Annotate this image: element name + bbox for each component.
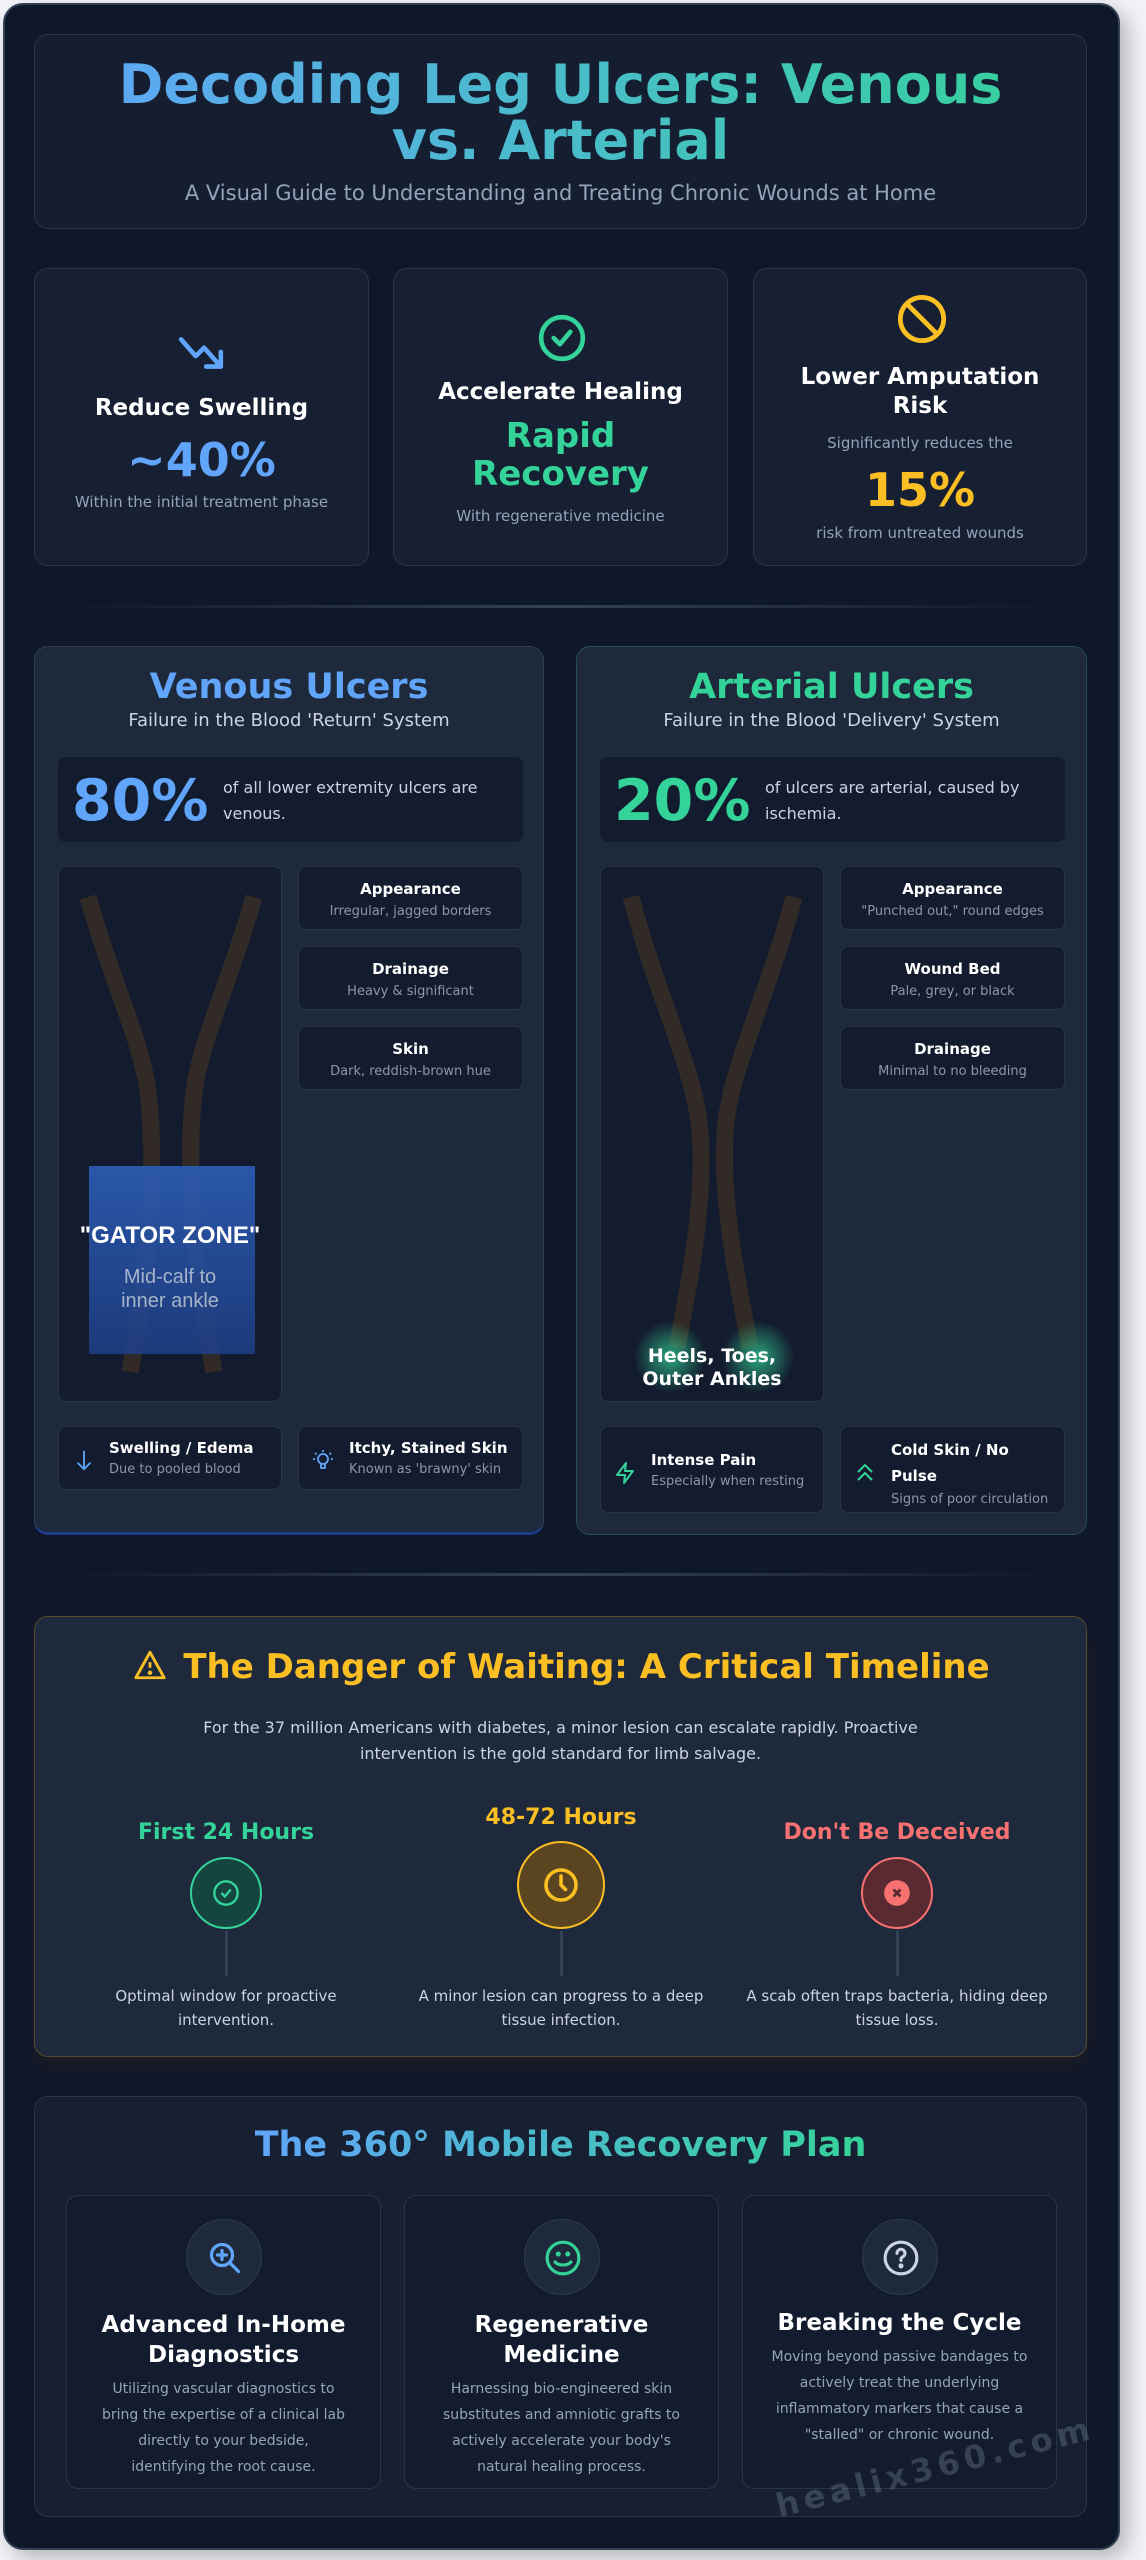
symptom: cold skin: [840, 1426, 1065, 1513]
panel: arterial ulcers: Failure in the Blood 'Delivery' System: [663, 710, 1000, 731]
timeline step: 48-72 hours: 48-72 Hours: [485, 1805, 637, 1830]
feature: wound bed: [840, 946, 1065, 1010]
stat card: accelerate healing: Rapid: [506, 416, 615, 456]
stat box: 80%: of all lower extremity ulcers are: [223, 778, 477, 797]
timeline step: 48-72 hours: tissue infection.: [501, 2011, 621, 2029]
stat card: lower amputation risk: Lower Amputation: [801, 364, 1039, 390]
hotspot label: Heels, Toes,: [648, 1345, 776, 1367]
title: Decoding Leg Ulcers: Venous: [119, 53, 1002, 116]
heading: Arterial Ulcers: [689, 667, 974, 707]
gator zone label: "GATOR ZONE": [80, 1222, 260, 1249]
stat card: reduce swelling: ~40%: [127, 433, 276, 487]
stat card: reduce swelling: [34, 268, 369, 566]
feature: appearance: [840, 866, 1065, 930]
leg diagram: venous: inner ankle: [121, 1290, 219, 1312]
icon: check circle: [538, 314, 586, 362]
hotspot label: Outer Ankles: [642, 1368, 782, 1390]
stat card: accelerate healing: Accelerate Healing: [438, 379, 683, 405]
symptom: swelling: Swelling / Edema: [109, 1439, 254, 1457]
stat card: reduce swelling: Reduce Swelling: [95, 395, 308, 421]
intro text: For the 37 million Americans with diabetes, a minor lesion can escalate rapidly. Proactive: [203, 1718, 918, 1737]
header card: [34, 34, 1087, 229]
icon: ban: [898, 295, 946, 343]
stat card: lower amputation risk: Risk: [893, 393, 947, 419]
timeline step: first 24 hours: Optimal window for proactive: [115, 1987, 337, 2005]
card: diagnostics: Advanced In-Home: [102, 2312, 345, 2338]
timeline step: first 24 hours: [115, 1820, 337, 2029]
stat box: 20%: 20%: [614, 768, 750, 834]
stat box: 20%: [600, 757, 1065, 842]
feature: skin: [298, 1026, 523, 1090]
feature: wound bed: Pale, grey, or black: [890, 984, 1015, 999]
card: regenerative medicine: [404, 2195, 719, 2489]
feature: appearance: Appearance: [360, 880, 461, 898]
stat card: accelerate healing: [393, 268, 728, 566]
watermark: healix360.com: [772, 2409, 1098, 2525]
card: diagnostics: Diagnostics: [148, 2342, 299, 2368]
timeline step: 48-72 hours: A minor lesion can progress to a deep: [419, 1987, 703, 2005]
stat card: accelerate healing: Recovery: [472, 454, 649, 494]
symptom: intense pain: Especially when resting: [651, 1474, 804, 1489]
stat card: accelerate healing: With regenerative medicine: [456, 507, 665, 525]
intro text: [203, 1718, 918, 1763]
timeline step: don't be deceived: A scab often traps bacteria, hiding deep: [746, 1987, 1048, 2005]
card: breaking the cycle: Moving beyond passive bandages to actively treat the underlying inflammatory markers that cause a "stalled" or chronic wound.: [772, 2349, 1028, 2443]
symptom: cold skin: Signs of poor circulation: [891, 1492, 1048, 1507]
icon: trend down: [178, 337, 224, 369]
feature: drainage: Drainage: [914, 1040, 991, 1058]
intro text: intervention is the gold standard for limb salvage.: [360, 1744, 761, 1763]
subtitle: A Visual Guide to Understanding and Treating Chronic Wounds at Home: [185, 181, 936, 205]
panel: danger timeline: [34, 1616, 1087, 2057]
feature: drainage: Drainage: [372, 960, 449, 978]
stat box: 80%: [58, 757, 523, 842]
timeline step: don't be deceived: Don't Be Deceived: [784, 1820, 1010, 1845]
card: diagnostics: [66, 2195, 381, 2489]
leg diagram: arterial: [600, 866, 824, 1402]
symptom: itchy skin: Itchy, Stained Skin: [349, 1439, 508, 1457]
card: regenerative medicine: Harnessing bio-engineered skin substitutes and amniotic grafts to actively accelerate your body's natural healing process.: [443, 2381, 680, 2475]
stat box: 20%: ischemia.: [765, 804, 841, 823]
title: vs. Arterial: [392, 109, 729, 172]
feature: skin: Dark, reddish-brown hue: [330, 1064, 491, 1079]
leg diagram: venous: Mid-calf to: [124, 1266, 216, 1288]
stat card: lower amputation risk: [753, 268, 1087, 566]
feature: wound bed: Wound Bed: [904, 960, 1000, 978]
feature: drainage: Minimal to no bleeding: [878, 1064, 1027, 1079]
stat card: lower amputation risk: 15%: [865, 463, 975, 517]
stat box: 20%: of ulcers are arterial, caused by: [765, 778, 1019, 797]
symptom: swelling: [58, 1426, 282, 1490]
title: [35, 57, 1086, 169]
timeline step: first 24 hours: intervention.: [178, 2011, 274, 2029]
leg diagram: venous: [58, 866, 282, 1402]
feature: drainage: [840, 1026, 1065, 1090]
card: diagnostics: Utilizing vascular diagnostics to bring the expertise of a clinical lab directly to your bedside, identifying the root cause.: [102, 2381, 345, 2475]
feature: appearance: [298, 866, 523, 930]
heading: The 360° Mobile Recovery Plan: [255, 2125, 866, 2165]
timeline step: 48-72 hours: [418, 1805, 703, 2029]
symptom: intense pain: [600, 1426, 824, 1513]
card: regenerative medicine: Medicine: [503, 2342, 620, 2368]
panel: arterial ulcers: [576, 646, 1087, 1535]
symptom: itchy skin: [298, 1426, 523, 1490]
feature: skin: Skin: [392, 1040, 429, 1058]
timeline step: don't be deceived: [746, 1820, 1048, 2029]
card: breaking the cycle: [742, 2195, 1057, 2489]
stat card: lower amputation risk: risk from untreated wounds: [816, 524, 1024, 542]
feature: drainage: [298, 946, 523, 1010]
panel: recovery plan: [34, 2096, 1087, 2517]
stat box: 80%: venous.: [223, 804, 286, 823]
panel: venous ulcers: [34, 646, 544, 1535]
symptom: swelling: Due to pooled blood: [109, 1462, 241, 1477]
heading with warning icon: The Danger of Waiting: A Critical Timeline: [183, 1647, 990, 1687]
stat card: reduce swelling: Within the initial treatment phase: [75, 493, 328, 511]
feature: drainage: Heavy & significant: [347, 984, 474, 999]
timeline step: don't be deceived: tissue loss.: [856, 2011, 938, 2029]
timeline step: first 24 hours: First 24 Hours: [138, 1820, 314, 1845]
symptom: intense pain: Intense Pain: [651, 1451, 756, 1469]
symptom: itchy skin: Known as 'brawny' skin: [349, 1462, 501, 1477]
card: regenerative medicine: Regenerative: [475, 2312, 648, 2338]
feature: appearance: Irregular, jagged borders: [330, 904, 491, 919]
symptom: cold skin: Pulse: [891, 1467, 937, 1485]
stat box: 80%: 80%: [72, 768, 208, 834]
symptom: cold skin: Cold Skin / No: [891, 1441, 1009, 1459]
stat card: lower amputation risk: Significantly reduces the: [827, 434, 1013, 452]
hotspot label: [642, 1345, 782, 1390]
panel: venous ulcers: Failure in the Blood 'Return' System: [128, 710, 450, 731]
card: breaking the cycle: Breaking the Cycle: [778, 2310, 1021, 2336]
feature: appearance: Appearance: [902, 880, 1003, 898]
feature: appearance: "Punched out," round edges: [861, 904, 1044, 919]
heading: Venous Ulcers: [150, 667, 428, 707]
